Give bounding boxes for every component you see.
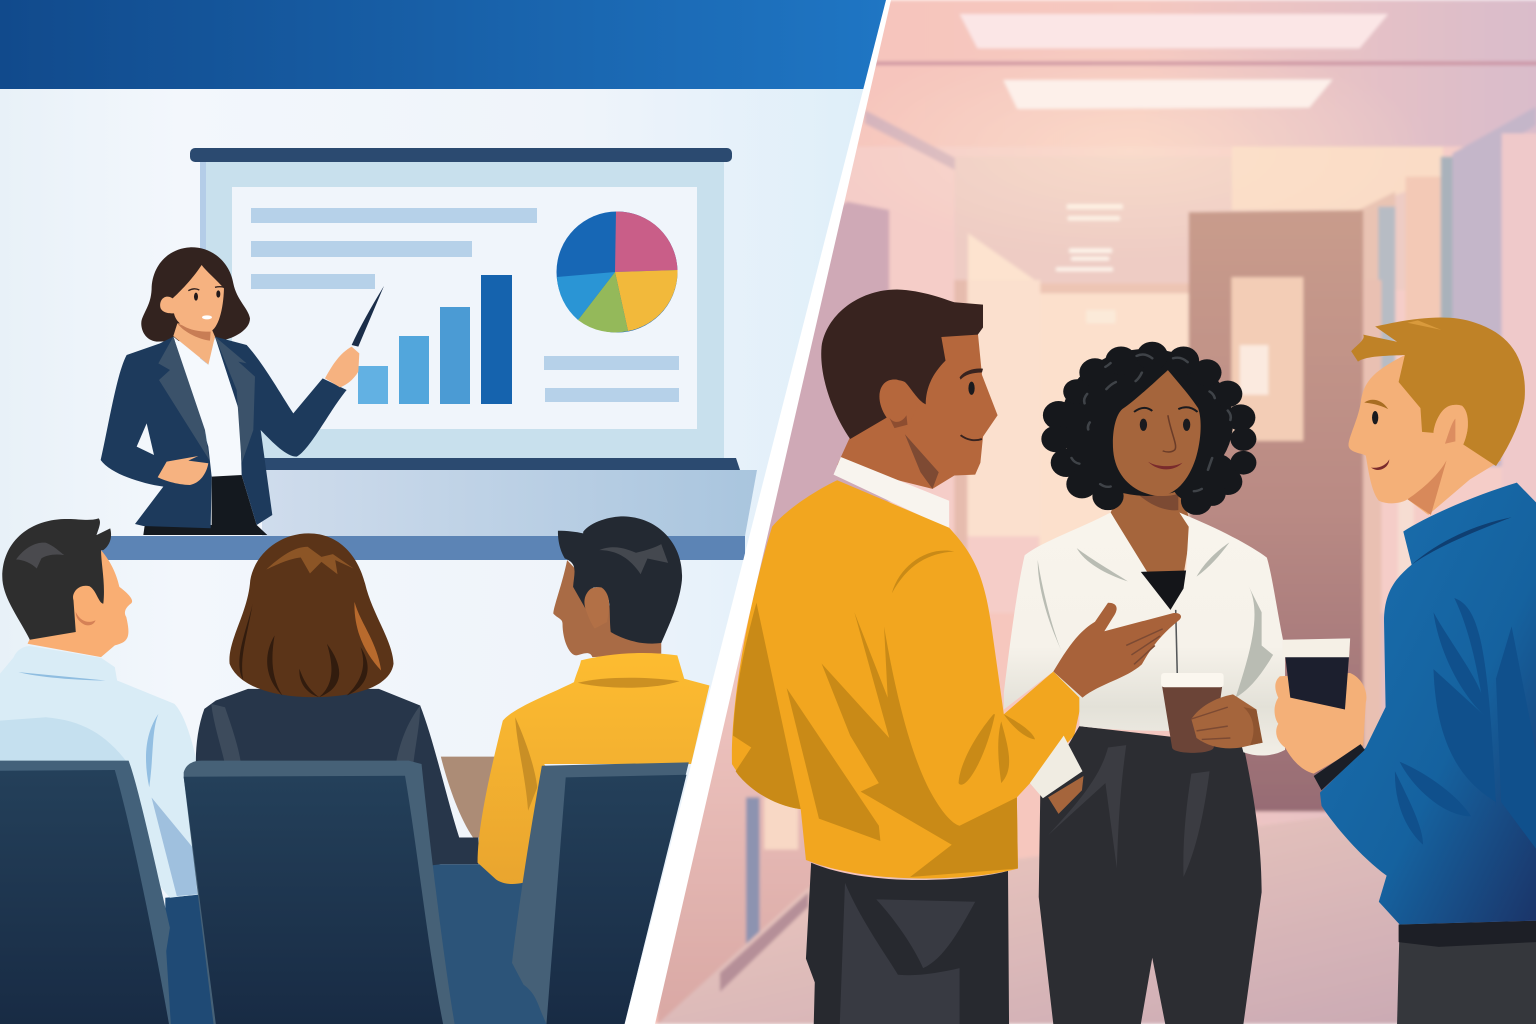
sweater — [732, 480, 1082, 878]
collar — [834, 457, 949, 529]
audience chairs — [0, 761, 689, 1024]
curly hair — [1041, 342, 1256, 515]
neck — [1110, 492, 1189, 609]
header band — [0, 0, 890, 89]
chair right — [512, 762, 689, 1024]
room floor behind audience — [165, 757, 551, 1024]
face — [1113, 370, 1201, 496]
trousers — [806, 863, 1009, 1024]
man in yellow sweater — [732, 289, 1082, 1024]
woman in white blouse — [1004, 342, 1285, 1024]
audience member: man in yellow shirt — [478, 516, 709, 884]
pie chart — [556, 211, 678, 332]
panel: informal hallway conversation — [650, 0, 1536, 1024]
chair centre — [184, 761, 455, 1024]
conference room wall — [0, 89, 890, 1024]
audience member: man in light blue shirt — [0, 518, 198, 898]
brown coffee cup — [1162, 683, 1223, 753]
warm ceiling glow — [914, 110, 1300, 198]
dark coffee cup — [1285, 655, 1349, 710]
head — [1349, 355, 1501, 515]
recessed corridor lights — [1056, 204, 1123, 271]
ceiling light panels — [772, 14, 1536, 109]
presentation table — [100, 458, 757, 560]
hallway background — [650, 0, 1536, 1024]
blouse — [1004, 513, 1285, 756]
hand holding cup — [1275, 673, 1366, 774]
bar chart — [358, 275, 512, 404]
chair left — [0, 761, 171, 1024]
man in blue jacket — [1275, 317, 1536, 1024]
screen text lines — [251, 208, 679, 402]
hallway ceiling and walls — [753, 108, 1536, 613]
presenter — [101, 247, 384, 535]
projection screen — [190, 148, 732, 460]
trousers — [1039, 726, 1262, 1024]
hallway base — [650, 0, 1536, 1024]
trousers — [1397, 921, 1536, 1024]
jacket — [1320, 483, 1536, 925]
gesturing hand of man in yellow — [1053, 603, 1181, 698]
hallway door and floor — [656, 209, 1414, 1024]
head — [837, 332, 998, 489]
panel: formal presentation — [0, 0, 890, 1024]
audience member: woman with brown hair — [196, 533, 478, 868]
